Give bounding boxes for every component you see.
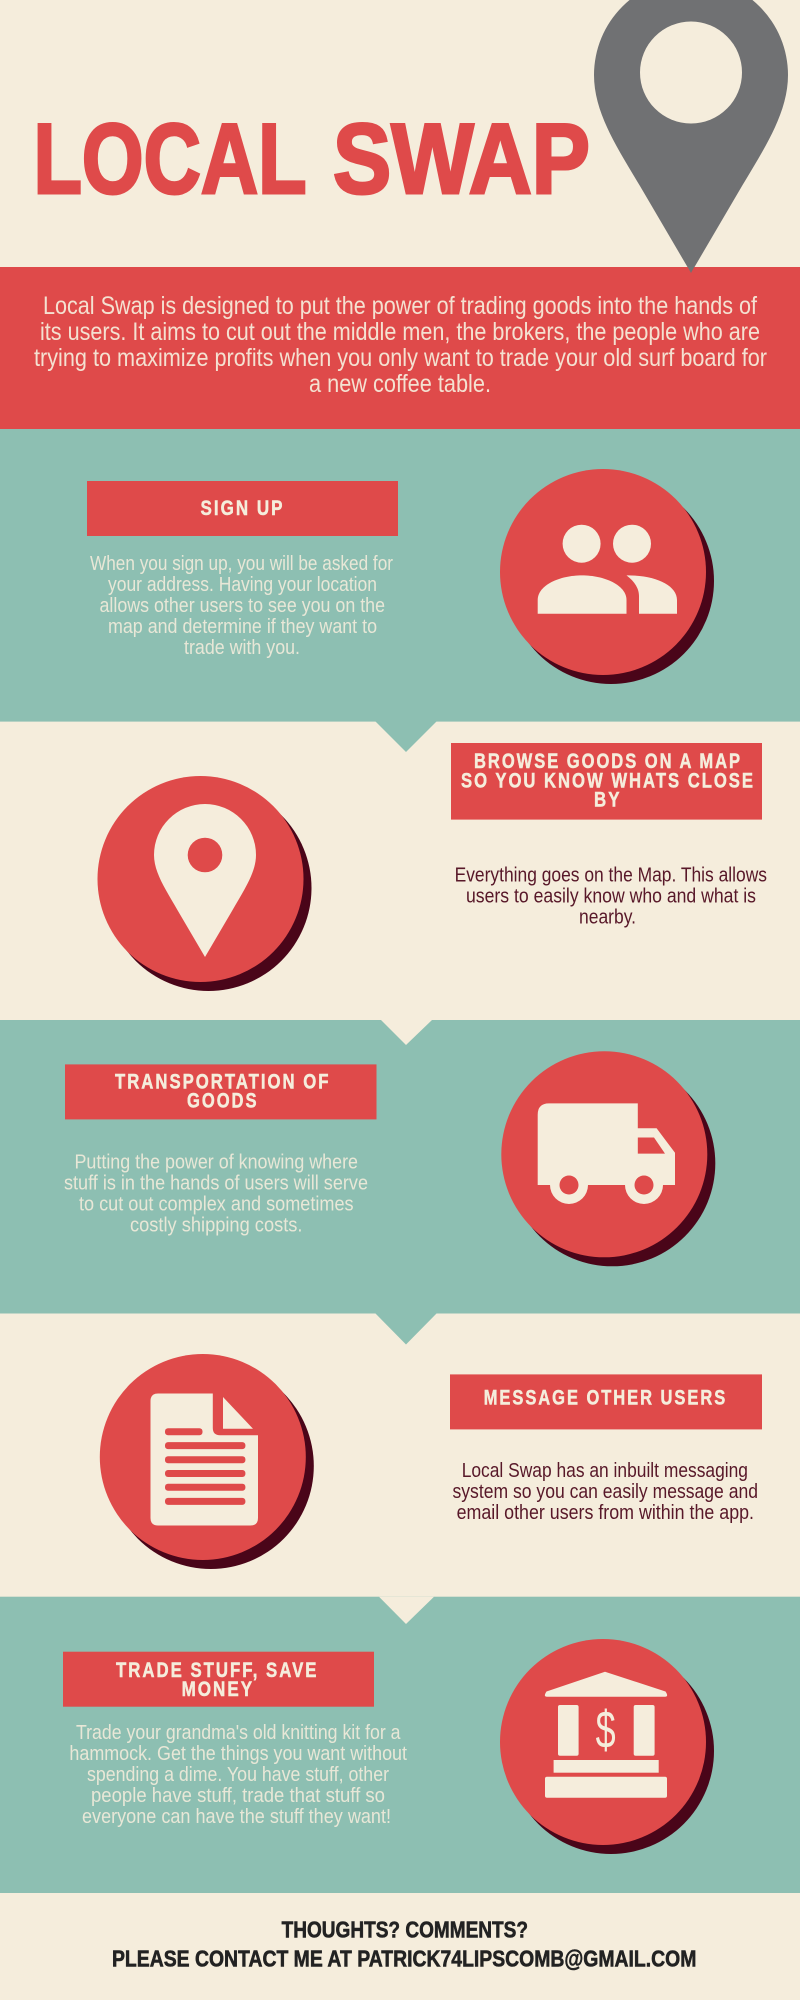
- text: trade description: Trade your grandma's old knitting kit for a: [76, 1722, 401, 1744]
- icon: large map pin: [594, 0, 788, 273]
- intro text: [34, 292, 767, 398]
- panel: introduction: [0, 267, 800, 429]
- text: transportation description: stuff is in the hands of users will serve: [64, 1172, 368, 1194]
- text: transportation description: costly shipping costs.: [130, 1215, 302, 1237]
- icon: pin tip overlapping band: [688, 266, 694, 273]
- heading: trade stuff: MONEY: [182, 1678, 254, 1701]
- heading: sign up: SIGN UP: [200, 497, 284, 520]
- heading: transportation: GOODS: [187, 1090, 258, 1113]
- heading: browse goods: [451, 743, 762, 820]
- text: trade description: [69, 1722, 407, 1828]
- heading: transportation: [65, 1064, 376, 1119]
- title: LOCAL: [34, 103, 306, 214]
- text: messaging description: Local Swap has an inbuilt messaging: [462, 1460, 748, 1482]
- panel: transportation of goods: [0, 1020, 800, 1344]
- heading: transportation: TRANSPORTATION OF: [115, 1070, 330, 1094]
- footer contact text: THOUGHTS? COMMENTS?: [282, 1917, 528, 1943]
- text: sign up description: trade with you.: [184, 637, 300, 659]
- arrow: down from transportation: [375, 1313, 437, 1344]
- text: messaging description: [452, 1460, 758, 1524]
- text: browse description: nearby.: [579, 907, 636, 929]
- heading: trade stuff: TRADE STUFF, SAVE: [116, 1659, 318, 1682]
- panel: message other users: [100, 1354, 762, 1569]
- text: trade description: everyone can have the stuff they want!: [82, 1806, 391, 1828]
- text: sign up description: your address. Having your location: [108, 574, 377, 596]
- text: trade description: spending a dime. You have stuff, other: [87, 1764, 389, 1786]
- text: trade description: people have stuff, trade that stuff so: [91, 1785, 385, 1807]
- text: transportation description: Putting the power of knowing where: [74, 1152, 358, 1174]
- footer contact text: [112, 1917, 696, 1972]
- icon: people in circle: [500, 469, 714, 684]
- heading: sign up: [87, 481, 398, 536]
- title: SWAP: [333, 103, 590, 214]
- arrow: notch into trade panel: [379, 1597, 434, 1624]
- text: transportation description: [64, 1152, 368, 1237]
- icon: bank in circle: [500, 1639, 714, 1854]
- panel: sign up: [0, 429, 800, 752]
- panel: header: [34, 0, 788, 273]
- heading: browse goods: BY: [594, 789, 622, 812]
- heading: message other users: MESSAGE OTHER USERS: [484, 1387, 727, 1410]
- text: sign up description: When you sign up, you will be asked for: [90, 553, 393, 575]
- title: [34, 103, 590, 214]
- heading: trade stuff: [63, 1652, 374, 1707]
- intro text: a new coffee table.: [309, 370, 491, 398]
- text: sign up description: [90, 553, 393, 659]
- heading: message other users: [450, 1374, 762, 1429]
- text: browse description: [455, 865, 767, 929]
- arrow: down from sign up: [375, 721, 437, 752]
- icon: truck in circle: [501, 1051, 715, 1266]
- text: sign up description: map and determine if they want to: [108, 616, 377, 638]
- arrow: notch into transportation panel: [381, 1020, 432, 1045]
- icon: bank in circle: $: [596, 1701, 616, 1760]
- text: sign up description: allows other users to see you on the: [100, 595, 385, 617]
- text: transportation description: to cut out complex and sometimes: [79, 1194, 354, 1216]
- text: browse description: users to easily know who and what is: [466, 886, 756, 908]
- footer contact text: PLEASE CONTACT ME AT PATRICK74LIPSCOMB@GMAIL.COM: [112, 1946, 696, 1972]
- icon: map pin in circle: [98, 776, 312, 991]
- panel: trade stuff, save money: [0, 1597, 800, 1893]
- text: messaging description: email other users from within the app.: [457, 1502, 754, 1524]
- panel: browse goods on a map: [98, 743, 767, 991]
- icon: document in circle: [100, 1354, 314, 1569]
- text: trade description: hammock. Get the things you want without: [69, 1743, 407, 1765]
- text: messaging description: system so you can easily message and: [452, 1481, 758, 1503]
